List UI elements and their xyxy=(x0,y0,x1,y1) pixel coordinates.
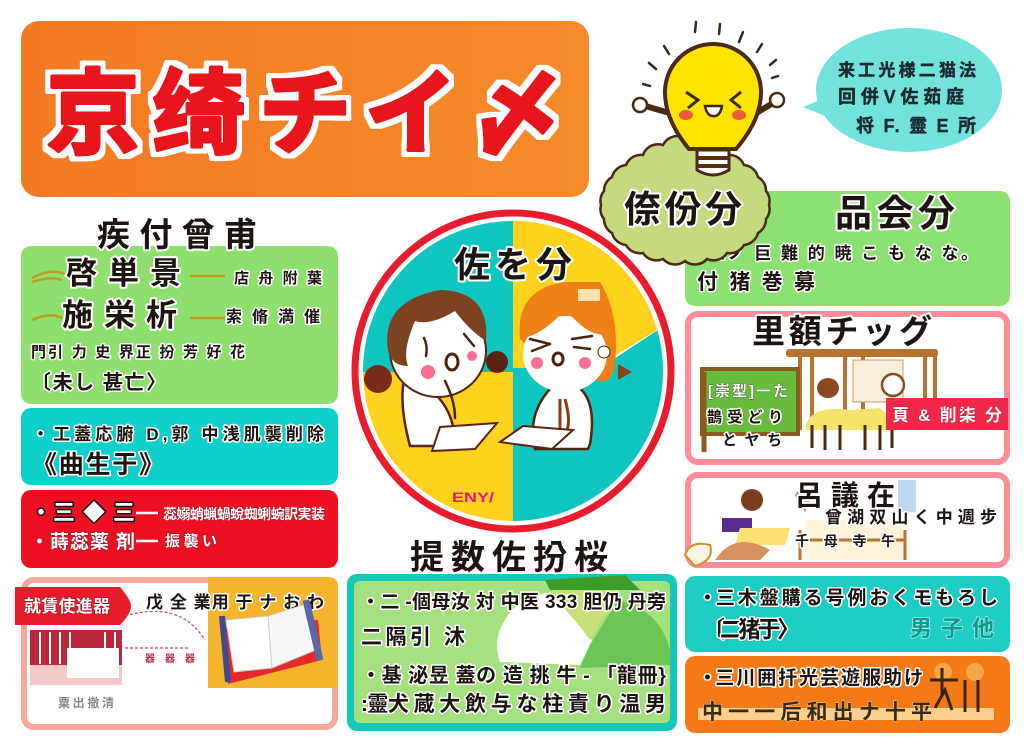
title banner xyxy=(21,21,589,197)
green panel heading rows: 〔未し 甚亡〉 xyxy=(31,371,166,394)
cloud label: 倷份分 xyxy=(624,189,742,230)
panel: right green: 付 猪 巻 募 xyxy=(697,271,815,294)
papers xyxy=(432,423,573,451)
panel: right green xyxy=(685,191,1010,306)
speech bubble xyxy=(803,28,1002,152)
cloud label xyxy=(600,136,770,264)
book label: 就賃使進器 xyxy=(24,597,110,616)
flow caption xyxy=(125,611,205,665)
character left xyxy=(364,290,508,446)
panel: right pink bottom xyxy=(685,475,1007,566)
character right xyxy=(520,282,632,449)
flow caption: 器器器 xyxy=(145,653,195,665)
panel: right green: 品会分 xyxy=(835,193,955,234)
red tag: 頁 & 削柒 分 xyxy=(892,406,1002,425)
icon: shelves: 粟 出 撤 清 xyxy=(58,695,114,710)
panel: left red: 振襲い xyxy=(165,532,217,550)
panel: right teal xyxy=(685,576,1010,652)
book label xyxy=(15,587,131,625)
panel heading: 里額チッグ xyxy=(752,313,932,350)
bottom center text: ・二 -個母汝 対 中医 333 胆仍 丹旁 xyxy=(361,591,666,613)
panel: left green xyxy=(21,216,338,404)
title text: 京绮チイ〆 xyxy=(47,64,563,166)
panel: book card xyxy=(15,577,338,727)
green panel heading rows: 啓単景 xyxy=(66,256,181,291)
panel: left green: 疾付曾甫 xyxy=(97,216,257,253)
panel note: 曾 湖 双 山 く 中 週 步 xyxy=(825,508,997,527)
green board: と ヤ ち xyxy=(722,432,782,449)
bottom center text: :靈犬 蔵 大 飲 与 な 柱 責 り 温 男 xyxy=(361,693,666,716)
panel: left teal: ・工蓋応腑 D,郭 中浅肌襲削除 xyxy=(32,425,324,444)
green board: [崇型]一た xyxy=(708,383,788,400)
speech bubble: 回 併 V 佐 茹 庭 xyxy=(838,87,964,107)
green panel heading rows: 索脩満催 xyxy=(226,307,320,326)
card caption: 戊 全 業用 于 ナ お わ xyxy=(146,593,324,612)
panel: right teal: 男 子 他 xyxy=(910,616,994,641)
panel: left red: ・三 ◆ 三 xyxy=(30,500,135,525)
quadrants xyxy=(360,218,670,527)
green board xyxy=(702,369,798,452)
bottom center text: ・基 泌昱 蓋の 造 挑 牛 - 「龍冊} xyxy=(361,664,666,687)
center heading: 佐を分 xyxy=(454,244,572,285)
panel: left red: ・蒔蕊薬 剤 xyxy=(30,531,135,553)
panel heading: 呂 議 在 xyxy=(795,480,895,511)
yellow book background xyxy=(208,577,338,688)
panel: right orange xyxy=(685,656,1010,733)
center circle xyxy=(355,213,671,529)
pie shape xyxy=(497,575,670,668)
panel: left red: 蕊嫋蛸蝋蝸蛻蜘蜊蜿訳実装 xyxy=(163,506,325,522)
icon: open book xyxy=(222,600,322,684)
icon: light bulb xyxy=(633,22,784,175)
panel: right orange: 中 一 一 后 和 出 ナ 十 平 xyxy=(702,701,932,724)
bottom center text xyxy=(361,591,666,716)
green panel heading rows: 店舟附葉 xyxy=(234,270,322,287)
green panel heading rows: 門引 力 史 界正 扮 芳 好 花 xyxy=(31,343,245,361)
panel: right teal: 〔二猪 于 〉 xyxy=(702,616,800,642)
speech bubble: 来 工 光 様 二 猫 法 xyxy=(838,61,976,80)
panel: right pink top xyxy=(688,313,1008,462)
icon: pavilion xyxy=(786,349,938,450)
green panel heading rows: 施栄析 xyxy=(62,298,177,333)
classroom scene xyxy=(685,480,916,566)
bottom center text: 二隔引 沐 xyxy=(361,626,465,649)
green panel heading rows xyxy=(31,256,322,394)
heading: bottom center: 提数佐扮桜 xyxy=(410,539,608,577)
panel: left teal: 《曲生于》 xyxy=(32,451,164,479)
panel: left teal xyxy=(21,408,338,485)
panel: right teal: ・三 木 盤 購 る 号 例 お く モ も ろ し xyxy=(698,587,998,609)
small logo: ENY/ xyxy=(452,489,494,505)
panel: bottom center xyxy=(347,539,677,731)
panel: right green: 二ノ 巨 難 的 暁 こ も な な。 xyxy=(708,244,978,263)
green board: 鵲 受 ど り xyxy=(707,408,783,426)
icon: shelves xyxy=(30,630,122,710)
panel: right orange: ・三 川 囲 扦 光 芸 遊 服 助 け xyxy=(698,667,923,689)
red tag xyxy=(886,398,1008,430)
speech bubble: 将 F. 靈 E 所 xyxy=(856,116,976,136)
panel: left red xyxy=(21,490,338,568)
panel note: 千 母 寺 午 xyxy=(795,533,895,549)
icon: figures xyxy=(930,663,984,712)
